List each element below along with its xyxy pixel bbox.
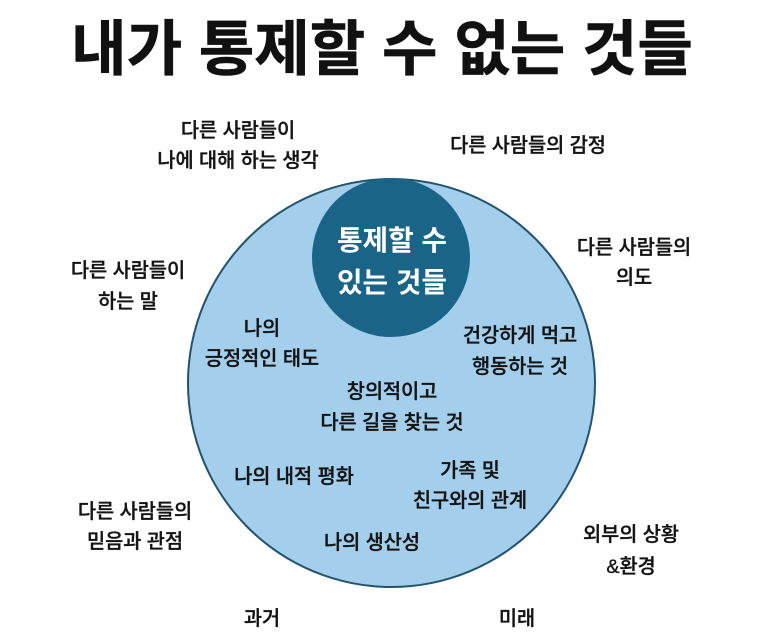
outside text: others' beliefs — [78, 501, 192, 553]
inside text: positive attitude — [205, 318, 319, 370]
outside text: what others think of me — [157, 120, 319, 172]
outside text: external circumstances — [583, 524, 679, 578]
outside text: what others say: 다른 사람들이 — [71, 260, 185, 282]
inside text: family and friends: 가족 및 — [440, 460, 500, 482]
inside text: creative paths: 다른 길을 찾는 것 — [320, 412, 464, 434]
inside text: healthy eating and action: 건강하게 먹고 — [463, 325, 577, 347]
inside text: my productivity: 나의 생산성 — [324, 532, 420, 554]
inside text: creative paths — [320, 381, 464, 434]
inner circle label: 통제할 수 — [337, 225, 447, 256]
title: 내가 통제할 수 없는 것들 — [71, 15, 693, 83]
outside text: others' intentions: 의도 — [616, 267, 652, 289]
outside text: future: 미래 — [499, 608, 535, 630]
inner circle label — [337, 225, 447, 298]
inner circle label: 있는 것들 — [337, 267, 447, 298]
outside text: others' beliefs: 믿음과 관점 — [87, 531, 183, 553]
inside text: family and friends — [413, 460, 527, 512]
inside text: healthy eating and action — [463, 325, 577, 378]
inside text: healthy eating and action: 행동하는 것 — [472, 356, 568, 378]
outside text: past: 과거 — [244, 608, 280, 630]
outside text: others' intentions — [577, 237, 691, 289]
inside text: creative paths: 창의적이고 — [347, 381, 437, 403]
inside text: positive attitude: 나의 — [244, 318, 280, 340]
outside text: what others say: 하는 말 — [98, 291, 158, 313]
inside text: inner peace: 나의 내적 평화 — [234, 466, 354, 488]
inside text: family and friends: 친구와의 관계 — [413, 490, 527, 512]
inner circle: things I can control — [312, 178, 470, 337]
outer circle: things I cannot control boundary — [187, 178, 596, 588]
outside text: others' emotions: 다른 사람들의 감정 — [450, 135, 606, 157]
inside text: positive attitude: 긍정적인 태도 — [205, 348, 319, 370]
outside text: external circumstances: &환경 — [606, 556, 656, 578]
outside text: what others say — [71, 260, 185, 313]
outside text: others' beliefs: 다른 사람들의 — [78, 501, 192, 523]
outside text: what others think of me: 나에 대해 하는 생각 — [157, 150, 319, 172]
outside text: what others think of me: 다른 사람들이 — [181, 120, 295, 142]
outside text: others' intentions: 다른 사람들의 — [577, 237, 691, 259]
outside text: external circumstances: 외부의 상황 — [583, 524, 679, 546]
